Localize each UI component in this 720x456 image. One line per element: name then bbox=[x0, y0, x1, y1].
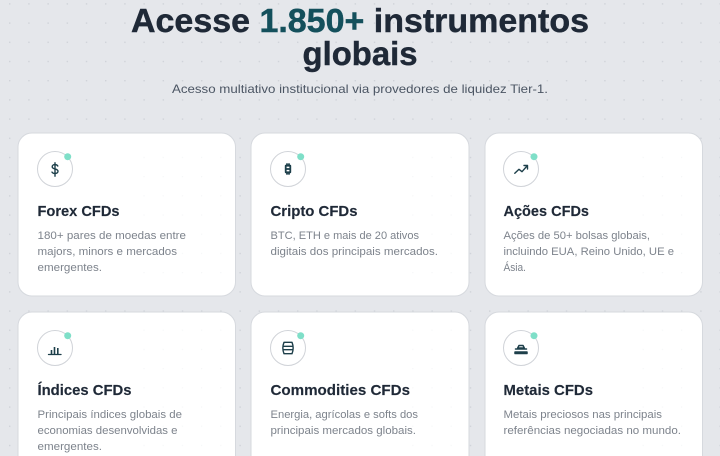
panel: Índices CFDs bbox=[18, 312, 236, 456]
description: emergentes. bbox=[38, 262, 102, 274]
description: majors, minors e mercados bbox=[38, 246, 178, 258]
heading: Ações CFDs bbox=[504, 203, 589, 220]
title bbox=[131, 2, 589, 72]
panel: Forex CFDs bbox=[18, 133, 236, 296]
description bbox=[270, 409, 418, 437]
icon: barrel bbox=[270, 330, 306, 366]
icon: trending up bbox=[504, 152, 538, 186]
panel: Metais CFDs bbox=[485, 312, 702, 456]
description: principais mercados globais. bbox=[270, 425, 416, 437]
description: referências negociadas no mundo. bbox=[504, 425, 681, 437]
description: Ásia. bbox=[504, 261, 526, 274]
title: Acesse 1.850+ instrumentos bbox=[131, 2, 589, 39]
panel: Commodities CFDs bbox=[251, 312, 469, 456]
description: digitais dos principais mercados. bbox=[270, 246, 438, 258]
panel: Cripto CFDs bbox=[251, 133, 469, 296]
title: globais bbox=[302, 35, 418, 72]
icon: gold bars bbox=[504, 330, 538, 366]
description bbox=[504, 409, 681, 437]
heading: Commodities CFDs bbox=[270, 382, 410, 399]
heading: Forex CFDs bbox=[38, 203, 120, 220]
description: 180+ pares de moedas entre bbox=[38, 230, 186, 242]
description: Principais índices globais de bbox=[38, 409, 182, 421]
description: emergentes. bbox=[38, 441, 102, 453]
description: Metais preciosos nas principais bbox=[504, 409, 663, 421]
description: Ações de 50+ bolsas globais, bbox=[504, 230, 650, 242]
icon: dollar bbox=[38, 152, 72, 186]
heading: Metais CFDs bbox=[504, 382, 593, 399]
icon: bar chart bbox=[38, 330, 72, 366]
description: BTC, ETH e mais de 20 ativos bbox=[270, 230, 419, 242]
panel: Ações CFDs bbox=[485, 133, 702, 296]
heading: Índices CFDs bbox=[38, 382, 132, 399]
description: economias desenvolvidas e bbox=[38, 425, 178, 437]
description bbox=[38, 230, 186, 274]
description bbox=[504, 230, 674, 274]
description: incluindo EUA, Reino Unido, UE e bbox=[504, 246, 674, 258]
icon: bitcoin bbox=[270, 152, 306, 186]
description bbox=[270, 230, 438, 258]
description bbox=[38, 409, 182, 453]
description: Energia, agrícolas e softs dos bbox=[270, 409, 418, 421]
subtitle: Acesso multiativo institucional via provedores de liquidez Tier-1. bbox=[172, 82, 548, 96]
heading: Cripto CFDs bbox=[270, 203, 358, 220]
